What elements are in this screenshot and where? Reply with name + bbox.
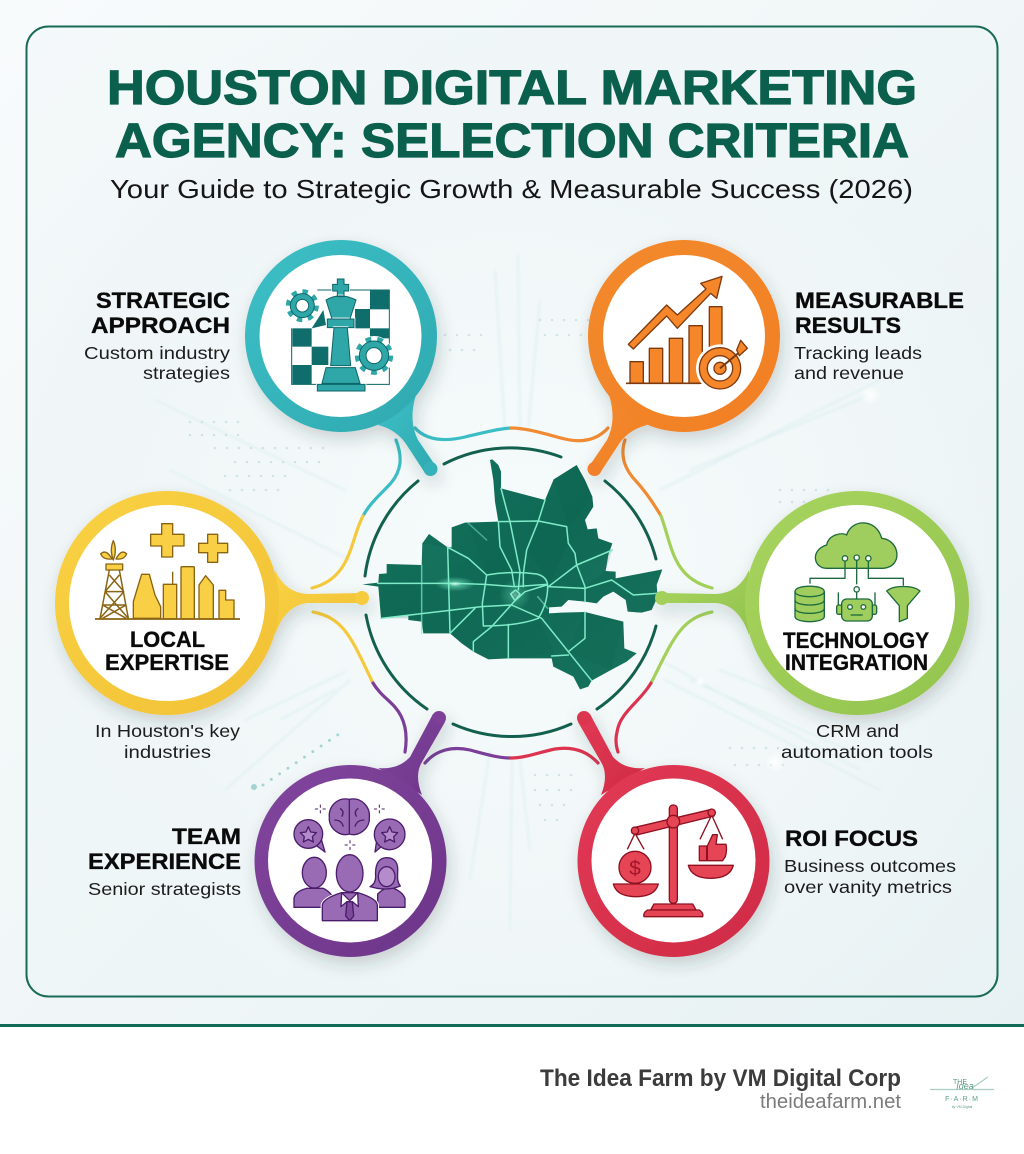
callout: technology integration circle xyxy=(655,491,969,715)
text block: measurable results: MEASURABLE xyxy=(795,288,964,313)
footer logo: Idea xyxy=(956,1081,974,1091)
text block: technology integration description xyxy=(781,721,933,762)
circle heading: technology integration xyxy=(783,628,929,675)
text block: measurable results: RESULTS xyxy=(795,313,901,338)
subtitle: Your Guide to Strategic Growth & Measurable Success (2026) xyxy=(110,174,913,204)
text block: ROI focus: Business outcomes xyxy=(784,856,956,876)
text block: strategic approach: strategies xyxy=(143,363,230,383)
callout: team experience circle xyxy=(254,711,446,957)
text block: strategic approach: APPROACH xyxy=(91,313,230,338)
circle heading: technology integration: TECHNOLOGY xyxy=(783,628,929,653)
text block: measurable results xyxy=(794,288,964,383)
circle heading: technology integration: INTEGRATION xyxy=(785,650,928,675)
text block: strategic approach xyxy=(84,288,230,383)
callout: local expertise circle xyxy=(55,491,369,715)
callout: measurable results circle xyxy=(588,240,780,476)
text block: team experience: EXPERIENCE xyxy=(88,849,241,874)
text block: technology integration description: CRM and xyxy=(816,721,899,741)
central ring arcs xyxy=(365,448,656,737)
icon: cloud, database, robot and funnel xyxy=(795,523,920,622)
text block: team experience: TEAM xyxy=(172,824,241,849)
text block: local expertise description: industries xyxy=(124,742,211,762)
circle heading: local expertise: EXPERTISE xyxy=(105,650,229,675)
outer coloured connector curves xyxy=(312,428,712,763)
icon: growth chart and target xyxy=(626,276,747,392)
text block: ROI focus xyxy=(784,826,956,897)
text block: technology integration description: automation tools xyxy=(781,742,933,762)
title: AGENCY: SELECTION CRITERIA xyxy=(115,115,909,168)
icon: chess king, board and gears xyxy=(288,279,391,391)
icon: team, brain and star bubbles xyxy=(294,799,405,921)
text block: strategic approach: STRATEGIC xyxy=(96,288,230,313)
footer band xyxy=(0,1024,1024,1154)
text block: local expertise description: In Houston's key xyxy=(95,721,240,741)
footer company name: The Idea Farm by VM Digital Corp xyxy=(540,1065,901,1092)
text block: team experience: Senior strategists xyxy=(88,879,241,899)
text block: ROI focus: ROI FOCUS xyxy=(785,826,918,851)
text block: local expertise description xyxy=(95,721,240,762)
circle heading: local expertise xyxy=(105,627,229,675)
text block: ROI focus: over vanity metrics xyxy=(784,877,952,897)
background network decoration xyxy=(155,255,880,930)
footer website: theideafarm.net xyxy=(760,1091,901,1113)
footer logo xyxy=(930,1077,994,1109)
circle heading: local expertise: LOCAL xyxy=(130,627,205,652)
callout: ROI focus circle xyxy=(577,711,770,957)
icon: balance scale with coin and thumbs-up: $ xyxy=(629,857,641,880)
main panel xyxy=(26,26,998,996)
callout: strategic approach circle xyxy=(245,240,438,476)
text block: strategic approach: Custom industry xyxy=(84,343,230,363)
title: HOUSTON DIGITAL MARKETING xyxy=(107,62,917,115)
text block: measurable results: and revenue xyxy=(794,363,904,383)
central Houston map xyxy=(362,459,662,689)
title xyxy=(107,62,917,168)
footer logo: by VM Digital xyxy=(952,1105,973,1109)
text block: team experience xyxy=(88,824,241,899)
footer logo: F·A·R·M xyxy=(945,1096,979,1103)
footer logo: THE xyxy=(953,1079,967,1086)
icon: oil derrick, skyline and crosses xyxy=(95,524,240,619)
text block: measurable results: Tracking leads xyxy=(794,343,922,363)
icon: balance scale with coin and thumbs-up xyxy=(613,805,733,917)
